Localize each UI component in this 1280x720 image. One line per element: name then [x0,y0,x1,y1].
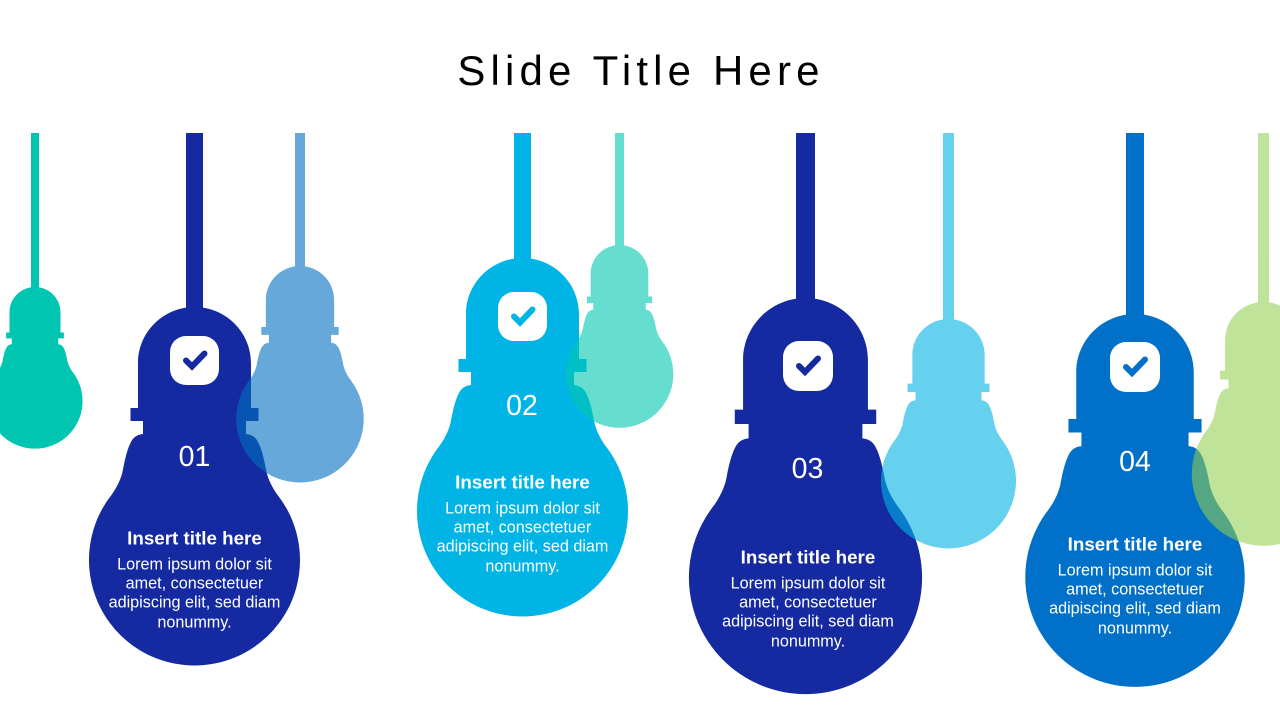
text block 02: amet, consectetuer [454,518,592,536]
text block 02 [437,390,608,576]
small bulb: teal, far left [0,133,83,449]
text block 02: adipiscing elit, sed diam [437,538,608,556]
text block 03: nonummy. [771,632,845,650]
text block 01: Insert title here [127,528,262,548]
text block 01 [109,441,280,632]
text block 04: adipiscing elit, sed diam [1049,600,1221,618]
text block 03: adipiscing elit, sed diam [722,612,894,630]
bulb 03: navy [689,133,922,694]
text block 03: 03 [792,453,823,485]
text block 03 [722,453,894,650]
bulb 04: blue [1025,133,1245,687]
text block 03: Lorem ipsum dolor sit [731,574,886,592]
icon: check badge 04 [1110,342,1160,392]
text block 04: Lorem ipsum dolor sit [1058,562,1213,580]
small bulb: turquoise [566,133,673,428]
text block 01: 01 [179,441,210,473]
bulb 01: navy [89,133,300,665]
small bulb: sky blue [881,133,1016,548]
text block 04 [1049,446,1221,638]
text block 01: adipiscing elit, sed diam [109,594,280,612]
text block 04: Insert title here [1068,534,1202,554]
text block 01: nonummy. [157,614,232,632]
text block 03: amet, consectetuer [739,594,877,612]
title: Slide Title Here [457,47,825,94]
small bulb: green [1192,133,1280,546]
text block 01: amet, consectetuer [126,574,264,592]
bulb 02: cyan [417,133,628,616]
text block 04: 04 [1119,446,1151,478]
text block 02: 02 [506,390,538,422]
text block 03: Insert title here [741,546,875,568]
text block 02: Lorem ipsum dolor sit [445,500,600,518]
text block 04: nonummy. [1098,620,1172,638]
text block 04: amet, consectetuer [1066,580,1204,598]
text block 01: Lorem ipsum dolor sit [117,556,272,574]
icon: check badge 01 [170,336,219,385]
icon: check badge 03 [783,341,833,391]
text block 02: Insert title here [455,472,590,492]
icon: check badge 02 [498,292,547,341]
small bulb: light blue [236,133,364,483]
text block 02: nonummy. [485,558,560,576]
